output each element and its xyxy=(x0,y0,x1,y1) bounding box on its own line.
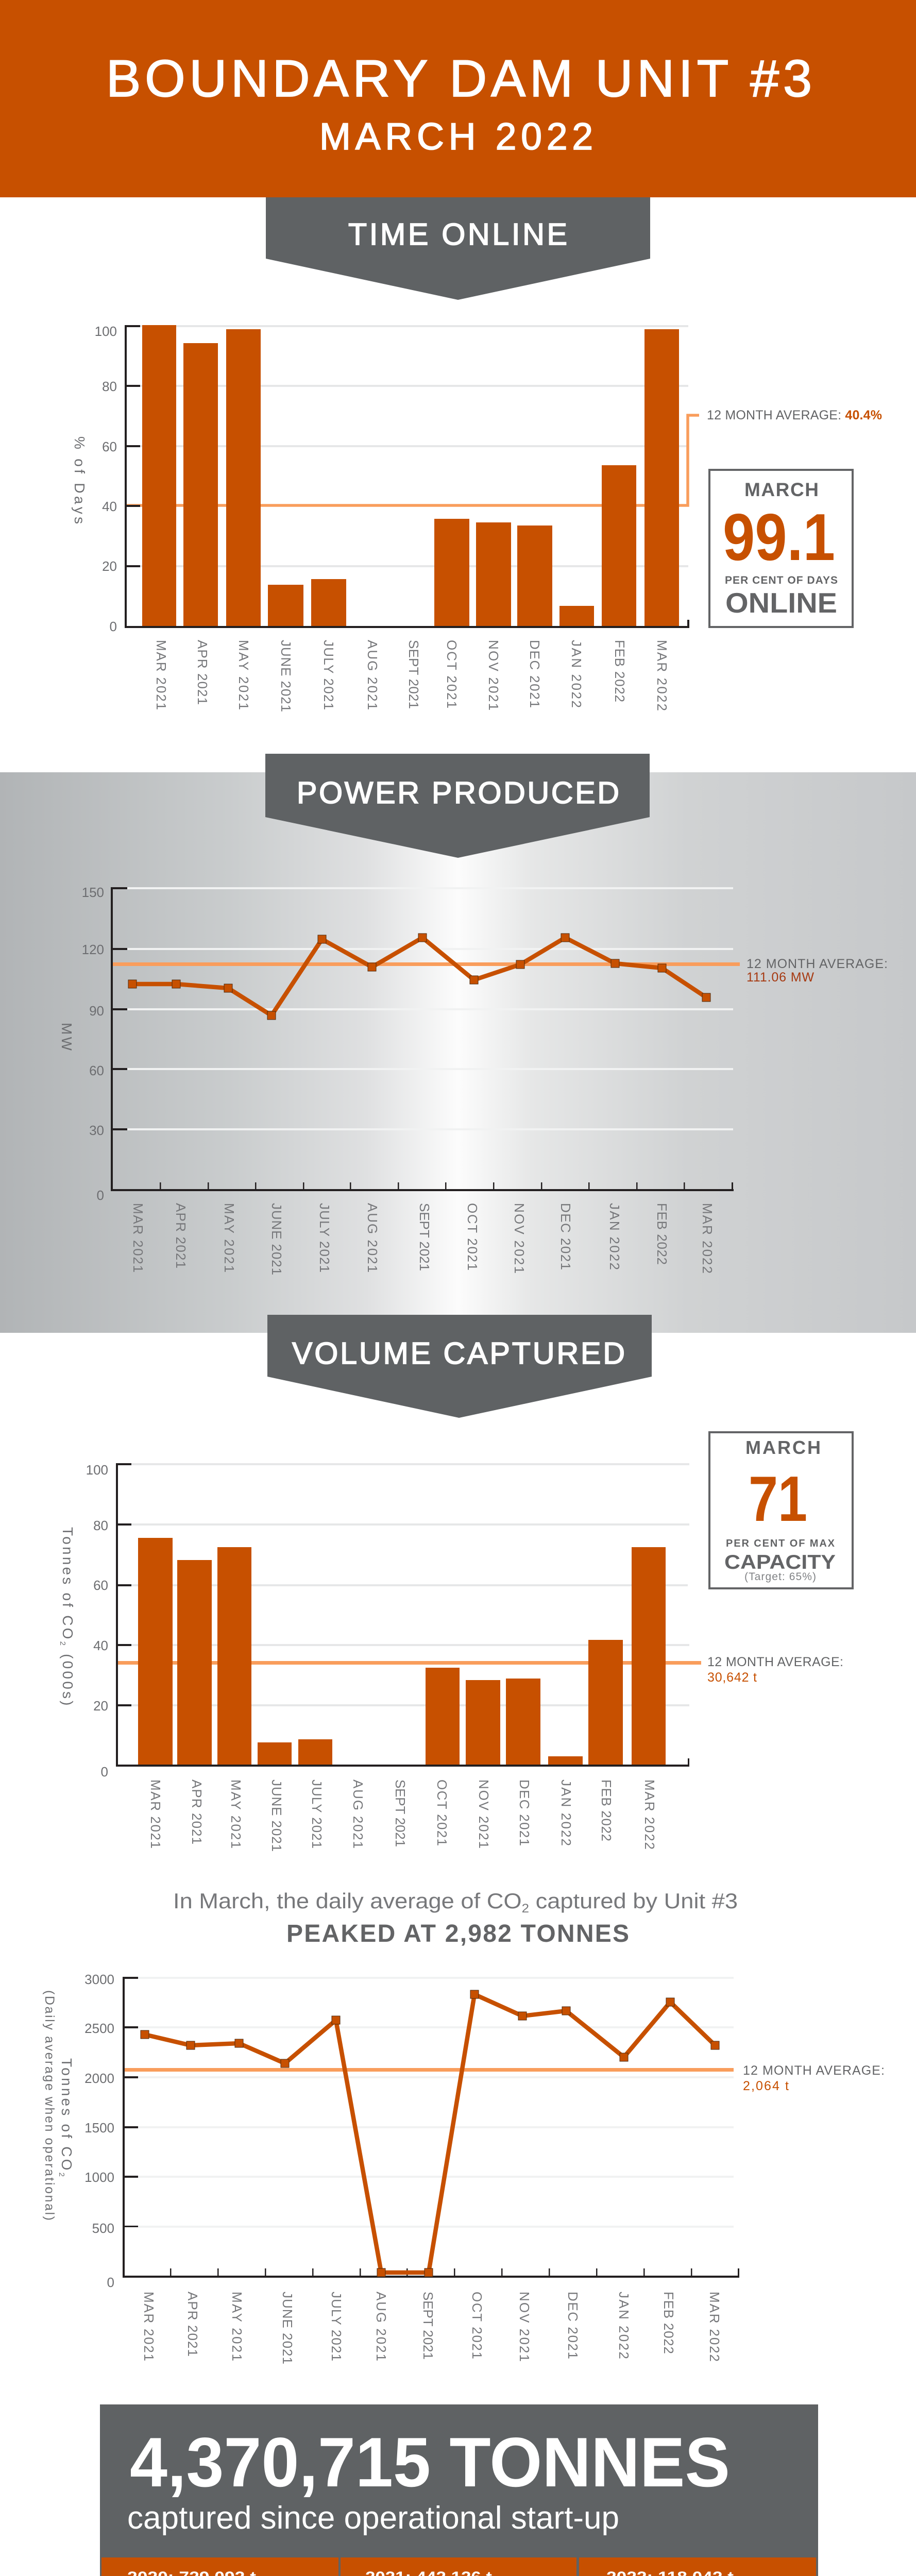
average label: daily average: 2,064 t xyxy=(743,2079,789,2093)
axes xyxy=(111,887,734,1191)
x axis labels: JAN 2022 xyxy=(616,2292,632,2359)
callout: 71 per cent of max capacity: (Target: 65%) xyxy=(744,1571,816,1583)
x axis labels: DEC 2021 xyxy=(527,640,542,708)
y axis labels: 150 xyxy=(82,885,104,900)
chart: power produced line xyxy=(59,885,740,1275)
heading: daily average statement xyxy=(173,1889,738,1947)
callout: 99.1 per cent of days online: MARCH xyxy=(744,479,819,500)
x axis labels: OCT 2021 xyxy=(444,640,460,708)
y axis labels: 500 xyxy=(92,2221,114,2236)
x axis labels: MAR 2022 xyxy=(654,640,670,711)
x axis labels: AUG 2021 xyxy=(350,1780,366,1849)
total tonnes: 4,370,715 TONNES xyxy=(130,2423,730,2501)
average line xyxy=(117,1661,701,1665)
y axis title: 2 xyxy=(57,2173,66,2179)
y axis labels: 0 xyxy=(97,1188,104,1203)
y axis labels: 80 xyxy=(102,379,117,394)
x axis labels: DEC 2021 xyxy=(558,1203,573,1270)
average line xyxy=(124,2068,734,2072)
year: 2022 xyxy=(579,2557,816,2576)
section banner: power produced: POWER PRODUCED xyxy=(297,776,619,810)
y axis labels: 100 xyxy=(86,1462,108,1478)
year: 2020 xyxy=(101,2557,338,2576)
x axis labels: MAR 2022 xyxy=(707,2292,722,2362)
x axis labels xyxy=(148,1780,657,1852)
x axis labels: OCT 2021 xyxy=(465,1203,480,1270)
x axis labels: NOV 2021 xyxy=(486,640,501,710)
x axis labels xyxy=(141,2292,722,2364)
x axis labels: DEC 2021 xyxy=(565,2292,581,2359)
axes xyxy=(123,1977,739,2278)
x axis labels: NOV 2021 xyxy=(476,1780,491,1849)
axes xyxy=(125,325,689,628)
axes xyxy=(116,1463,689,1767)
callout: 99.1 per cent of days online: 99.1 xyxy=(723,500,835,574)
callout: 71 per cent of max capacity: CAPACITY xyxy=(724,1551,836,1573)
average label: volume captured xyxy=(707,1655,843,1685)
y axis labels: 60 xyxy=(93,1578,108,1593)
x axis labels: SEPT 2021 xyxy=(393,1780,408,1847)
callout: 71 per cent of max capacity: PER CENT OF MAX xyxy=(726,1538,835,1549)
x axis labels: APR 2021 xyxy=(185,2292,200,2357)
data line xyxy=(145,1994,715,2273)
y axis labels: 20 xyxy=(93,1698,108,1714)
x axis labels: FEB 2022 xyxy=(661,2292,676,2354)
y axis labels: 3000 xyxy=(84,1972,114,1987)
peak value heading: PEAKED AT 2,982 TONNES xyxy=(286,1920,629,1947)
x axis labels: OCT 2021 xyxy=(434,1780,450,1846)
x axis labels: APR 2021 xyxy=(173,1203,189,1268)
title: BOUNDARY DAM UNIT #3 xyxy=(106,50,812,108)
y axis title: Tonnes of CO xyxy=(59,2058,75,2173)
header banner xyxy=(0,0,916,197)
y axis labels xyxy=(82,885,104,1203)
y axis labels: 40 xyxy=(102,499,117,514)
x axis labels: MAY 2021 xyxy=(228,1780,244,1849)
y axis labels: 90 xyxy=(89,1003,104,1019)
heading: daily average statement: captured by Unit #3 xyxy=(529,1889,738,1913)
y axis labels xyxy=(86,1462,108,1780)
x axis labels: NOV 2021 xyxy=(512,1203,527,1274)
x axis labels: AUG 2021 xyxy=(365,1203,380,1273)
x axis labels: DEC 2021 xyxy=(517,1780,532,1846)
x axis labels: FEB 2022 xyxy=(612,640,627,702)
heading: daily average statement: 2 xyxy=(522,1902,529,1916)
data markers xyxy=(141,1990,719,2277)
panel: power produced background xyxy=(0,772,916,1333)
callout: 71 per cent of max capacity xyxy=(709,1432,853,1588)
y axis labels: 2500 xyxy=(84,2021,114,2036)
y axis labels: 80 xyxy=(93,1518,108,1533)
average label: volume captured: 12 MONTH AVERAGE: xyxy=(707,1655,843,1669)
x axis labels: JUNE 2021 xyxy=(269,1203,284,1275)
y axis labels xyxy=(95,324,117,634)
x axis labels: JULY 2021 xyxy=(329,2292,344,2361)
x axis labels: JAN 2022 xyxy=(569,640,584,708)
callout: 71 per cent of max capacity: MARCH xyxy=(745,1437,821,1458)
y axis labels: 2000 xyxy=(84,2071,114,2086)
y axis title: MW xyxy=(59,1023,75,1051)
section banner: power produced xyxy=(265,754,650,858)
section banner: volume captured: VOLUME CAPTURED xyxy=(292,1336,625,1370)
x axis labels: MAR 2022 xyxy=(700,1203,715,1274)
x axis labels: JUNE 2021 xyxy=(280,2292,295,2364)
average label: daily average xyxy=(743,2063,885,2093)
bars xyxy=(138,1538,666,1766)
y axis labels: 0 xyxy=(110,619,117,634)
x axis labels: MAY 2021 xyxy=(229,2292,245,2361)
y axis title: Tonnes of CO xyxy=(60,1527,76,1641)
x axis labels: MAR 2021 xyxy=(148,1780,163,1849)
y axis title: (000s) xyxy=(60,1648,76,1708)
x axis labels: JULY 2021 xyxy=(317,1203,332,1273)
x axis labels: FEB 2022 xyxy=(599,1780,614,1841)
y axis labels: 100 xyxy=(95,324,117,339)
y axis labels: 0 xyxy=(107,2275,114,2290)
x axis labels: MAR 2021 xyxy=(141,2292,157,2361)
y axis labels: 60 xyxy=(89,1063,104,1078)
y axis labels: 1500 xyxy=(84,2120,114,2136)
y axis subtitle: (Daily average when operational) xyxy=(42,1990,57,2221)
x axis labels: APR 2021 xyxy=(195,640,210,705)
y axis title: % of Days xyxy=(72,436,88,524)
x axis labels: AUG 2021 xyxy=(365,640,380,710)
chart: volume captured bars xyxy=(58,1462,701,1852)
data markers xyxy=(128,934,710,1020)
y axis labels: 30 xyxy=(89,1123,104,1138)
y axis title xyxy=(42,1990,75,2221)
average label: power produced: 12 MONTH AVERAGE: xyxy=(747,957,888,971)
y axis labels: 120 xyxy=(82,942,104,957)
x axis labels: SEPT 2021 xyxy=(417,1203,432,1271)
x axis labels: JUNE 2021 xyxy=(269,1780,284,1852)
callout: 99.1 per cent of days online: ONLINE xyxy=(725,587,837,619)
y axis title: 2 xyxy=(58,1641,67,1648)
section banner: time online: TIME ONLINE xyxy=(348,217,567,251)
x axis labels: AUG 2021 xyxy=(374,2292,389,2361)
callout: 99.1 per cent of days online: PER CENT OF DAYS xyxy=(725,574,838,586)
bars xyxy=(142,325,679,626)
y axis labels: 20 xyxy=(102,558,117,574)
average label: power produced xyxy=(747,957,888,985)
average label: power produced: 111.06 MW xyxy=(747,970,814,985)
average label: time online: 12 MONTH AVERAGE: 40.4% xyxy=(707,408,882,422)
x axis labels: JAN 2022 xyxy=(607,1203,622,1270)
y axis labels: 60 xyxy=(102,439,117,454)
x axis labels xyxy=(130,1203,715,1275)
average label: volume captured: 30,642 t xyxy=(707,1670,757,1685)
average line with connector xyxy=(126,415,699,505)
section banner: volume captured xyxy=(267,1315,652,1418)
x axis labels: JAN 2022 xyxy=(558,1780,574,1846)
x axis labels: SEPT 2021 xyxy=(420,2292,436,2360)
x axis labels: MAY 2021 xyxy=(222,1203,237,1273)
x axis labels: FEB 2022 xyxy=(654,1203,670,1265)
section banner: time online xyxy=(266,197,650,300)
total caption: captured since operational start-up xyxy=(127,2500,619,2536)
x axis labels: NOV 2021 xyxy=(517,2292,532,2362)
x axis labels: JULY 2021 xyxy=(321,640,336,710)
x axis labels: OCT 2021 xyxy=(469,2292,485,2359)
data line xyxy=(132,938,706,1015)
x axis labels: MAR 2022 xyxy=(642,1780,657,1850)
x axis labels: MAR 2021 xyxy=(130,1203,146,1273)
x axis labels: SEPT 2021 xyxy=(406,640,421,709)
heading: daily average statement: In March, the daily average of CO xyxy=(173,1889,497,1913)
y axis labels: 0 xyxy=(101,1764,108,1780)
chart: daily average line xyxy=(42,1972,739,2364)
average label: daily average: 12 MONTH AVERAGE: xyxy=(743,2063,885,2078)
subtitle: MARCH 2022 xyxy=(319,116,593,158)
panel: total captured xyxy=(100,2404,818,2576)
chart: time online bars xyxy=(72,324,699,712)
x axis labels: MAY 2021 xyxy=(236,640,251,710)
x axis labels xyxy=(154,640,670,712)
y axis labels xyxy=(84,1972,114,2290)
x axis labels: JULY 2021 xyxy=(309,1780,325,1849)
callout: 99.1 per cent of days online xyxy=(709,470,853,627)
callout: 71 per cent of max capacity: 71 xyxy=(749,1464,807,1535)
x axis labels: APR 2021 xyxy=(189,1780,205,1844)
average line xyxy=(112,962,740,966)
x axis labels: JUNE 2021 xyxy=(278,640,294,712)
y axis labels: 40 xyxy=(93,1638,108,1653)
year: 2021 xyxy=(341,2557,576,2576)
y axis labels: 1000 xyxy=(84,2170,114,2185)
x axis labels: MAR 2021 xyxy=(154,640,169,710)
